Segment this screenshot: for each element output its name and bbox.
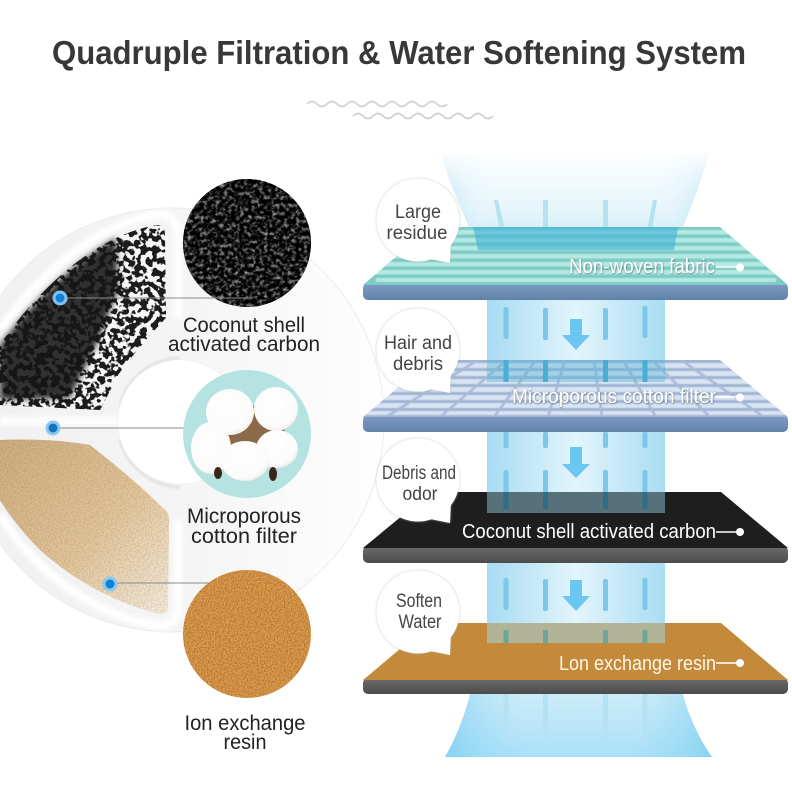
layer 2: microporous cotton filter [360, 360, 790, 432]
label: ion exchange resin [184, 712, 306, 754]
water flow: top funnel [442, 156, 708, 227]
speech bubble: hair and debris: Hair and [384, 333, 452, 354]
leader line and dot: cotton [46, 420, 205, 436]
label: microporous cotton filter: Microporous [187, 505, 301, 528]
title: Quadruple Filtration & Water Softening System [52, 34, 746, 71]
label: ion exchange resin: Ion exchange [184, 712, 306, 735]
filter cartridge disc [0, 208, 384, 632]
layer 4: ion exchange resin [363, 623, 788, 694]
label: microporous cotton filter layer: Microporous cotton filter [512, 386, 716, 408]
speech bubble: debris and odor: odor [402, 484, 438, 505]
resin compartment [0, 440, 169, 614]
sample circle: activated carbon [183, 179, 311, 307]
carbon compartment [0, 225, 166, 410]
layer 1: non-woven fabric [360, 227, 790, 300]
speech bubble: large residue: residue [386, 223, 448, 244]
speech bubble: soften water [376, 570, 460, 655]
water flow: column 1 [487, 300, 665, 382]
label: coconut shell activated carbon layer: Coconut shell activated carbon [462, 521, 716, 543]
speech bubble: large residue: Large [395, 202, 441, 223]
speech bubble: soften water: Water [398, 612, 442, 633]
sample circle: ion exchange resin [183, 570, 311, 698]
speech bubble: hair and debris [376, 308, 460, 393]
label: ion exchange resin layer: Lon exchange resin [559, 653, 716, 675]
water flow: column 2 [487, 432, 665, 513]
decorative wavy lines [307, 102, 493, 118]
label: coconut shell activated carbon [168, 314, 320, 356]
label: non-woven fabric: Non-woven fabric [569, 256, 715, 278]
label: ion exchange resin: resin [224, 731, 266, 754]
leader line and dot: resin [102, 576, 210, 592]
speech bubble: large residue [376, 178, 460, 263]
label: microporous cotton filter [187, 505, 301, 548]
water flow: column 3 [487, 563, 665, 643]
water flow: bottom funnel [445, 694, 712, 757]
label: coconut shell activated carbon: activated carbon [168, 333, 320, 356]
label: coconut shell activated carbon: Coconut shell [183, 314, 305, 337]
layer 3: coconut shell activated carbon [363, 492, 788, 563]
sample circle: cotton [183, 370, 311, 498]
label: microporous cotton filter: cotton filter [191, 525, 297, 548]
speech bubble: debris and odor: Debris and [382, 463, 456, 484]
leader line and dot: carbon [52, 290, 247, 306]
speech bubble: debris and odor [376, 438, 460, 523]
speech bubble: hair and debris: debris [393, 354, 443, 375]
speech bubble: soften water: Soften [396, 591, 442, 612]
